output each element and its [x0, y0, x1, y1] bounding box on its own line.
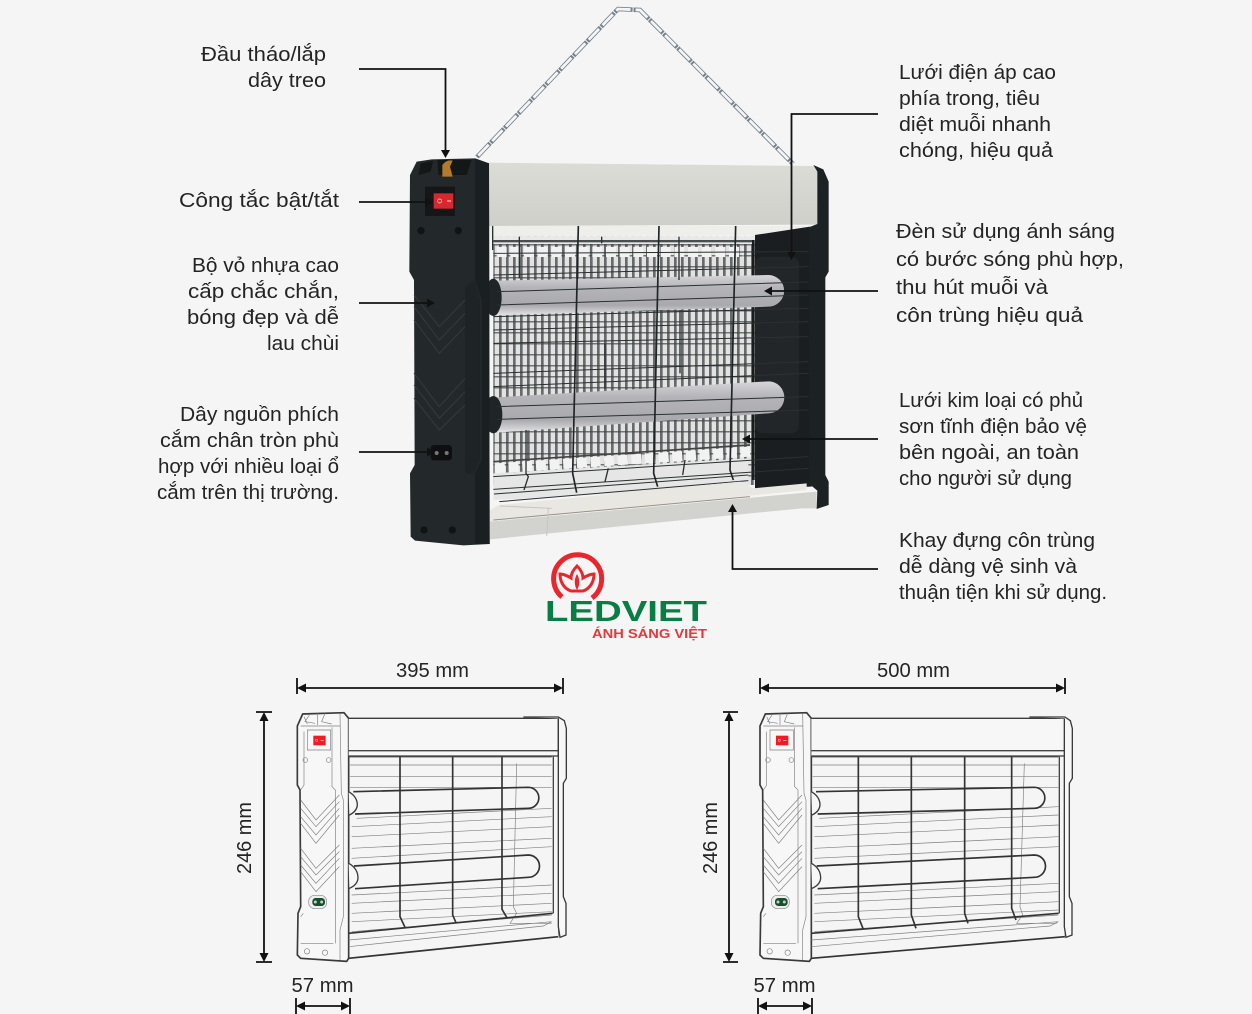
callout: insect tray	[728, 504, 1107, 604]
callout: insect tray: thuận tiện khi sử dụng.	[899, 582, 1107, 604]
tray	[349, 913, 558, 958]
hanger slot	[418, 160, 472, 175]
callout: power cord: Dây nguồn phích	[180, 404, 339, 426]
dimension drawing: 395 mm model	[234, 660, 566, 1014]
callout: plastic shell: bóng đẹp và dễ	[187, 306, 339, 329]
callout: outer metal mesh: cho người sử dụng	[899, 468, 1072, 490]
height dimension 246 mm	[700, 712, 738, 962]
tubes	[353, 787, 539, 889]
callout: outer metal mesh	[742, 390, 1087, 490]
callout: lamp: côn trùng hiệu quả	[896, 305, 1084, 327]
screws	[417, 227, 462, 534]
product photo: mosquito killer lamp	[409, 158, 829, 545]
callout: outer metal mesh: Lưới kim loại có phủ	[899, 390, 1083, 412]
UV tube top	[497, 275, 784, 315]
side housing	[297, 713, 358, 961]
UV tube bottom	[497, 381, 784, 433]
callout: lamp: Đèn sử dụng ánh sáng	[896, 221, 1115, 243]
depth dimension 57 mm: 57 mm	[292, 975, 354, 997]
vertical wires	[858, 757, 1016, 929]
callout: plastic shell: lau chùi	[267, 333, 339, 355]
callout: power cord: cắm chân tròn phù	[160, 429, 339, 452]
callout: hanger: Đầu tháo/lắp	[201, 43, 326, 66]
vertical wires	[400, 757, 507, 927]
callout: plastic shell: Bộ vỏ nhựa cao	[192, 255, 339, 277]
callout: hanger	[201, 43, 450, 158]
width dimension 395 mm	[297, 660, 563, 694]
width dimension 395 mm: 395 mm	[396, 660, 469, 682]
callout: power cord: cắm trên thị trường.	[157, 481, 339, 504]
tube sockets	[484, 279, 502, 433]
logo: LED Viet	[545, 555, 707, 641]
callout: lamp: có bước sóng phù hợp,	[896, 249, 1124, 271]
width dimension 500 mm: 500 mm	[877, 660, 950, 682]
callout: switch: Công tắc bật/tắt	[179, 189, 340, 212]
line art body	[760, 713, 1072, 961]
side housing	[760, 713, 821, 961]
width dimension 500 mm	[760, 660, 1065, 694]
height dimension 246 mm	[234, 712, 272, 962]
callout: inner high-voltage grid	[787, 62, 1056, 260]
chevron ribs	[414, 295, 465, 430]
depth dimension 57 mm	[754, 975, 816, 1014]
power switch	[425, 187, 455, 216]
callout: insect tray: Khay đựng côn trùng	[899, 530, 1095, 552]
logo tagline: ÁNH SÁNG VIỆT	[592, 626, 707, 641]
callout: lamp	[764, 221, 1124, 327]
dimension drawing: 500 mm model	[700, 660, 1072, 1014]
top silver bar	[489, 163, 817, 226]
callout: insect tray: dễ dàng vệ sinh và	[899, 555, 1078, 578]
hanging chain	[477, 9, 793, 164]
callout: hanger: dây treo	[248, 70, 326, 92]
height dimension 246 mm: 246 mm	[234, 802, 256, 874]
callout: power cord	[157, 404, 435, 504]
callout: power cord: hợp với nhiều loại ổ	[158, 456, 339, 478]
callout: lamp: thu hút muỗi và	[896, 276, 1049, 299]
depth dimension 57 mm	[292, 975, 354, 1014]
right housing	[1029, 717, 1072, 937]
right black housing	[809, 165, 829, 509]
power socket	[431, 445, 452, 460]
callout: switch	[179, 189, 433, 212]
callout: outer metal mesh: bên ngoài, an toàn	[899, 442, 1079, 464]
inner wire grid	[493, 237, 755, 500]
right housing	[523, 717, 566, 937]
callout: inner high-voltage grid: chóng, hiệu quả	[899, 140, 1054, 162]
right inner dark panel	[753, 227, 812, 488]
callout: plastic shell	[187, 255, 435, 355]
grid lines	[813, 763, 1058, 932]
logo bulb icon	[554, 555, 602, 598]
line art body	[297, 713, 566, 961]
callout: inner high-voltage grid: diệt muỗi nhanh	[899, 113, 1051, 136]
grid lines	[350, 763, 552, 932]
outer wire cage	[493, 226, 808, 502]
logo wordmark: LEDVIET	[545, 596, 707, 628]
bottom tray	[490, 482, 817, 539]
callout: plastic shell: cấp chắc chắn,	[188, 280, 339, 303]
callout: inner high-voltage grid: Lưới điện áp cao	[899, 62, 1056, 84]
tubes	[816, 787, 1045, 889]
depth dimension 57 mm: 57 mm	[754, 975, 816, 997]
left black housing	[409, 158, 490, 545]
callout: outer metal mesh: sơn tĩnh điện bảo vệ	[899, 416, 1087, 438]
top bar	[811, 718, 1065, 756]
tray	[811, 913, 1065, 958]
callout: inner high-voltage grid: phía trong, tiêu	[899, 88, 1040, 110]
height dimension 246 mm: 246 mm	[700, 802, 722, 874]
top bar	[349, 718, 558, 756]
